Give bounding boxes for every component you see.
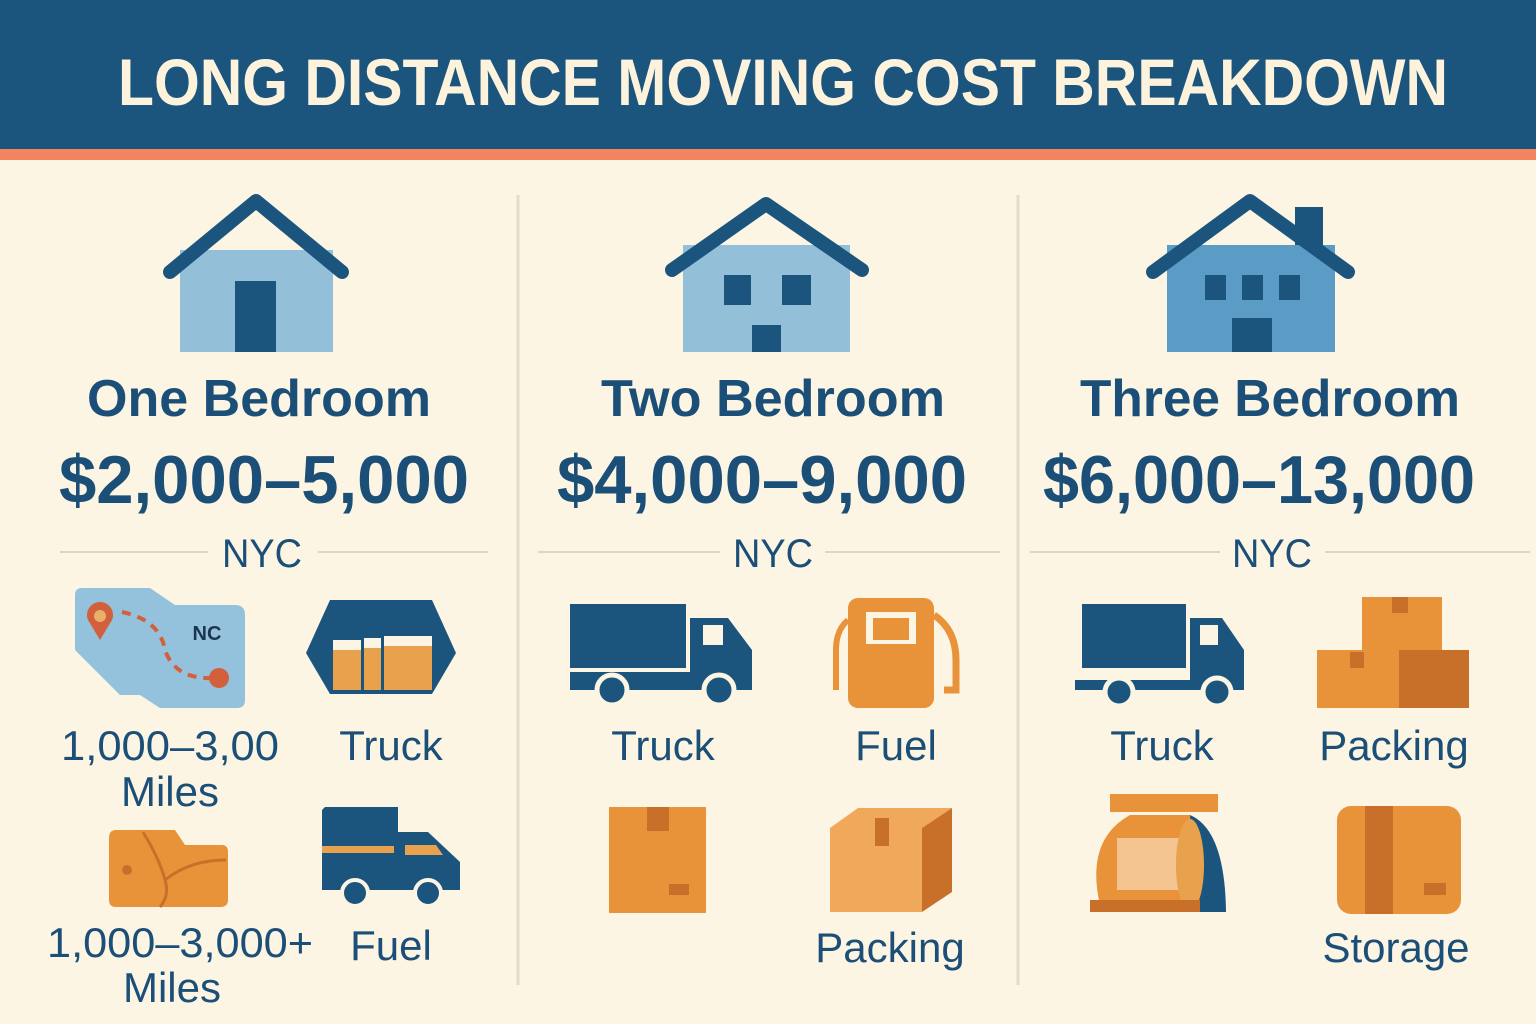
icon: box (609, 807, 706, 913)
panel: one bedroom (47, 201, 488, 1011)
panel: two bedroom (538, 204, 1000, 971)
price: $6,000–13,000 (1043, 442, 1475, 518)
icon: truck boxes (306, 600, 456, 694)
icon: map route: NC (193, 623, 221, 645)
heading: one bedroom: One Bedroom (87, 370, 431, 428)
icon: storage box (1337, 806, 1461, 914)
label: truck: Truck (339, 722, 444, 769)
label: packing: Packing (1319, 722, 1469, 769)
icon: stacked boxes (1317, 597, 1469, 708)
icon: truck (570, 604, 752, 705)
icon: house three (1153, 201, 1348, 352)
icon: packing box (830, 808, 952, 912)
heading: two bedroom: Two Bedroom (601, 370, 945, 428)
label: packing: Packing (815, 924, 965, 971)
price: $4,000–9,000 (557, 442, 967, 518)
icon: house one (170, 201, 342, 352)
header banner (0, 0, 1536, 160)
icon: van (322, 807, 460, 906)
icon: scale (1090, 794, 1226, 912)
icon: truck (1075, 604, 1244, 706)
label: miles 2: 1,000–3,000+ (47, 919, 313, 966)
price: $2,000–5,000 (59, 442, 469, 518)
heading: three bedroom: Three Bedroom (1080, 370, 1460, 428)
icon: fuel pump (836, 598, 956, 708)
location NYC: NYC (1232, 532, 1312, 576)
label: fuel: Fuel (855, 722, 937, 769)
label: storage: Storage (1322, 924, 1470, 971)
label: truck: Truck (611, 722, 716, 769)
icon: orange map (109, 830, 228, 907)
label: truck: Truck (1110, 722, 1215, 769)
panel: three bedroom (1030, 201, 1530, 971)
panel: one bedroom: Miles (123, 964, 221, 1011)
location NYC: NYC (733, 532, 813, 576)
label: miles 1: 1,000–3,00 (61, 722, 279, 769)
icon: house two (672, 204, 862, 352)
label: fuel: Fuel (350, 922, 432, 969)
location NYC: NYC (222, 532, 302, 576)
panel: one bedroom: Miles (121, 768, 219, 815)
icon: map route (75, 588, 245, 708)
